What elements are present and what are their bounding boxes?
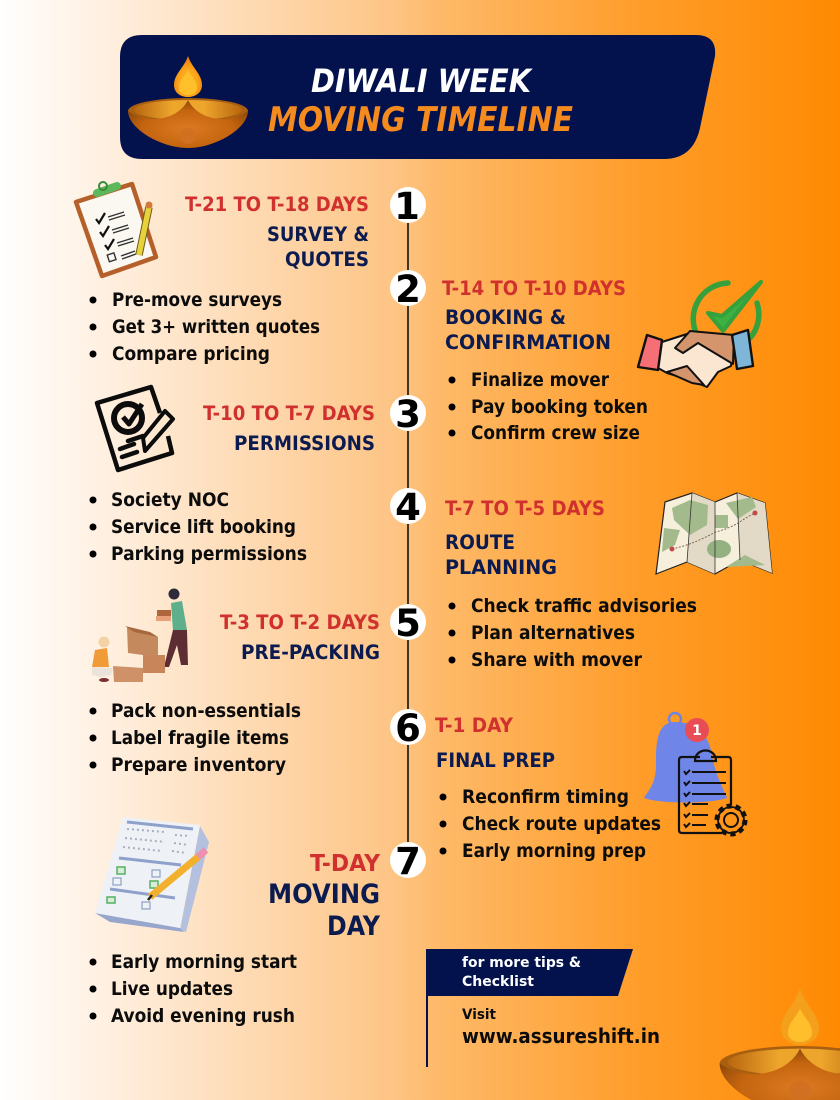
node 5: 5 xyxy=(395,602,421,645)
bullet list: Confirm crew size xyxy=(471,423,640,444)
website address: www.assureshift.in xyxy=(462,1024,660,1048)
bullet list: Pay booking token xyxy=(471,397,648,418)
icon: folded map xyxy=(656,493,772,574)
node 3: 3 xyxy=(395,393,421,436)
bullet list: Share with mover xyxy=(471,650,642,671)
step heading: CONFIRMATION xyxy=(445,331,611,354)
date label: T-1 DAY xyxy=(435,714,514,737)
bullet list xyxy=(90,952,297,1027)
date label: T-7 TO T-5 DAYS xyxy=(445,497,605,520)
bullet list: Early morning prep xyxy=(462,841,646,862)
date label: T-14 TO T-10 DAYS xyxy=(442,277,626,300)
bullet list xyxy=(90,290,320,365)
icon: people packing boxes xyxy=(92,588,188,682)
step heading: PRE-PACKING xyxy=(241,641,380,664)
bullet list: Compare pricing xyxy=(112,344,270,365)
step 5: pre-packing xyxy=(90,588,380,776)
step heading: DAY xyxy=(327,911,381,942)
step heading xyxy=(268,879,381,942)
step 6: final prep xyxy=(435,713,745,862)
bullet list: Check traffic advisories xyxy=(471,596,697,617)
node 1: 1 xyxy=(394,185,420,228)
step 7: moving day xyxy=(90,817,381,1027)
node 6: 6 xyxy=(395,707,421,750)
flag banner: for more tips & xyxy=(462,955,581,971)
step heading: QUOTES xyxy=(285,248,369,271)
step heading: SURVEY & xyxy=(267,223,369,246)
date label: T-21 TO T-18 DAYS xyxy=(185,193,369,216)
step heading: ROUTE xyxy=(445,531,515,554)
bullet list xyxy=(448,596,697,671)
icon: handshake with check xyxy=(638,282,761,387)
bullet list: Pre-move surveys xyxy=(112,290,282,311)
bullet list: Pack non-essentials xyxy=(111,701,301,722)
icon: clipboard xyxy=(76,182,156,276)
step 2: booking and confirmation xyxy=(442,277,761,444)
icon: bell and checklist: 1 xyxy=(692,723,702,739)
icon: diya lamp xyxy=(128,56,248,148)
step heading xyxy=(445,531,557,579)
date label: T-3 TO T-2 DAYS xyxy=(220,611,380,634)
title: DIWALI WEEK xyxy=(311,62,533,100)
step heading: PLANNING xyxy=(445,556,557,579)
bullet list: Parking permissions xyxy=(111,544,307,565)
flag banner xyxy=(426,949,633,1067)
step 4: route planning xyxy=(445,493,772,671)
bullet list: Check route updates xyxy=(462,814,661,835)
step heading xyxy=(267,223,369,271)
bullet list: Get 3+ written quotes xyxy=(112,317,320,338)
node 7: 7 xyxy=(395,840,421,883)
header banner xyxy=(120,35,715,159)
bullet list xyxy=(90,701,301,776)
node 2: 2 xyxy=(395,268,421,311)
step 3: permissions xyxy=(90,387,375,565)
visit text: Visit xyxy=(462,1007,496,1023)
bullet list: Live updates xyxy=(111,979,233,1000)
icon: notebook and pencil xyxy=(95,817,209,932)
date label: T-10 TO T-7 DAYS xyxy=(203,402,375,425)
step heading xyxy=(445,306,611,354)
step heading: BOOKING & xyxy=(445,306,566,329)
bullet list: Prepare inventory xyxy=(111,755,286,776)
bullet list: Society NOC xyxy=(111,490,229,511)
bullet list: Plan alternatives xyxy=(471,623,635,644)
node 4: 4 xyxy=(395,486,421,529)
flag banner: Checklist xyxy=(462,974,534,990)
bullet list xyxy=(448,370,648,444)
bullet list: Reconfirm timing xyxy=(462,787,629,808)
timeline spine with numbered nodes xyxy=(390,185,426,883)
date label: T-DAY xyxy=(310,851,380,877)
bullet list: Finalize mover xyxy=(471,370,609,391)
step heading: PERMISSIONS xyxy=(234,432,375,455)
step heading: MOVING xyxy=(268,879,380,910)
icon: corner diya lamp xyxy=(720,988,840,1100)
bullet list: Early morning start xyxy=(111,952,297,973)
footer call to action xyxy=(426,949,660,1067)
step heading: FINAL PREP xyxy=(436,749,555,772)
bullet list: Service lift booking xyxy=(111,517,296,538)
bullet list xyxy=(90,490,307,565)
bullet list: Avoid evening rush xyxy=(111,1006,295,1027)
step 1: survey and quotes xyxy=(76,182,369,365)
icon: bell and checklist xyxy=(644,713,745,834)
bullet list: Label fragile items xyxy=(111,728,289,749)
title: MOVING TIMELINE xyxy=(268,100,573,140)
bullet list xyxy=(440,787,661,862)
icon: signed document xyxy=(97,387,173,470)
title xyxy=(268,62,573,140)
